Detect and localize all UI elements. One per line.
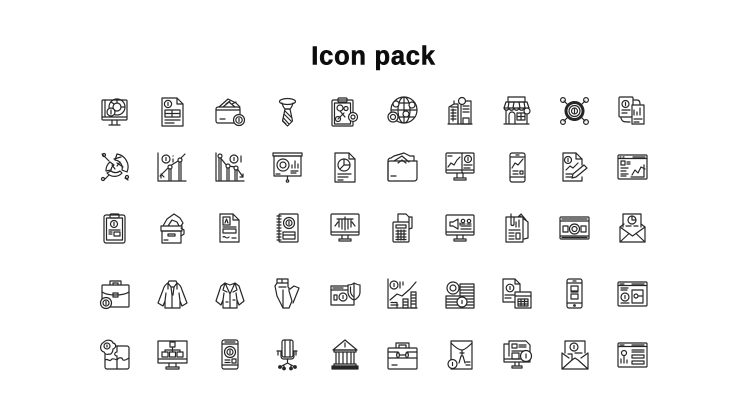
icon: wallet with cash and coin (216, 99, 244, 126)
icon: banknote (560, 217, 589, 239)
icon: browser report (618, 343, 647, 367)
icon: smartphone chart (510, 153, 525, 182)
icon: invoice with calendar (503, 279, 531, 308)
icon: monitor marketing (446, 215, 474, 241)
icon: cash folder (388, 153, 417, 181)
icon: rising bar chart (158, 153, 186, 181)
icon grid (100, 97, 647, 370)
icon: percentage ring diagram (102, 154, 128, 180)
icon: pie chart document (335, 153, 355, 182)
icon: briefcase with coin (100, 281, 129, 308)
icon: clipboard with strategy (332, 98, 358, 126)
icon: printing calculator (393, 214, 412, 242)
icon: envelope with receipt (562, 341, 588, 369)
icon: envelope with pie chart (620, 214, 645, 242)
icon: globe with coins (388, 97, 417, 123)
icon: phone with dial (222, 340, 238, 369)
icon: falling bar chart (216, 153, 244, 181)
icon: pinned reports (506, 214, 528, 242)
icon: invoice document (162, 98, 183, 126)
icon: network hub coin (561, 98, 588, 124)
icon: coin growth chart (388, 279, 417, 308)
icon: jigsaw puzzle with coin (101, 340, 129, 369)
icon: browser analytics (618, 155, 647, 179)
icon: curriculum vitae (220, 214, 239, 242)
icon: trousers (275, 279, 299, 308)
icon: shirt coat (158, 281, 187, 308)
icon: coin stacks (446, 282, 474, 308)
icon: clipboard report (104, 214, 125, 243)
icon: spiral notebook (277, 214, 298, 242)
icon: box with documents (161, 214, 184, 243)
icon: report with pen (563, 153, 587, 181)
icon: presentation board (273, 153, 302, 182)
icon: office chair (277, 340, 297, 370)
icon: sealed envelope with coin (448, 341, 472, 369)
icon: monitor org chart (158, 341, 187, 369)
icon: monitor with document (504, 341, 532, 368)
icon: suit jacket (216, 283, 244, 308)
icon: bank building (332, 340, 358, 369)
icon: storefront (504, 97, 530, 124)
icon: necktie (280, 98, 296, 126)
title: Icon pack (311, 42, 436, 70)
icon: monitor dashboard (446, 153, 474, 180)
icon: briefcase with lock (388, 343, 417, 369)
icon: cash with shield (331, 283, 360, 305)
icon: monitor with pie chart (102, 99, 127, 125)
icon: office buildings (448, 98, 472, 124)
icon: browser with payment (618, 282, 647, 306)
icon: monitor with pillars (331, 214, 359, 241)
icon: phone with stacked card (567, 279, 582, 308)
icon: linked reports (619, 97, 644, 124)
